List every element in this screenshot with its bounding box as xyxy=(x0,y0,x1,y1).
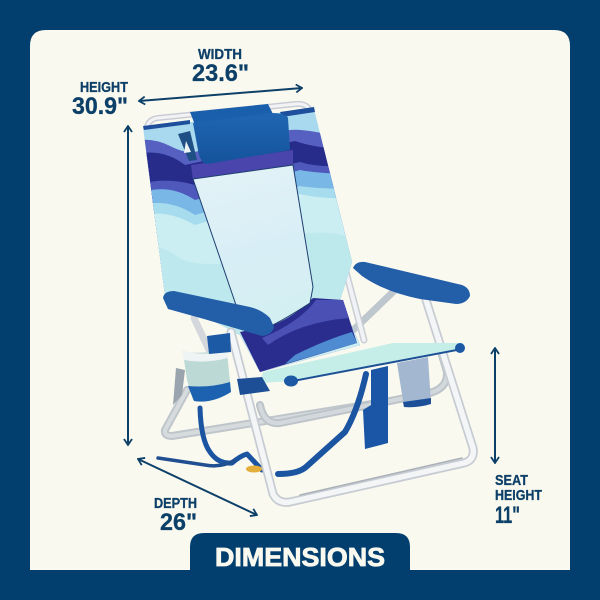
arrow: width xyxy=(139,88,302,101)
label: height: 30.9" xyxy=(72,93,128,120)
chair front frame xyxy=(231,300,473,502)
label: width xyxy=(192,46,249,87)
label: height: HEIGHT xyxy=(80,79,128,96)
seat front tube xyxy=(284,343,465,386)
arrow: height xyxy=(127,126,129,445)
label: width: WIDTH xyxy=(198,46,242,63)
seat fabric xyxy=(260,343,463,383)
title tab: DIMENSIONS xyxy=(215,542,385,572)
chair top rail xyxy=(146,104,311,130)
chair illustration xyxy=(130,100,473,502)
label: seat height: HEIGHT xyxy=(495,487,542,504)
arrow: seat height xyxy=(494,348,496,463)
chair rear frame xyxy=(165,268,447,436)
chair back fabric xyxy=(143,112,360,372)
label: seat height: SEAT xyxy=(495,472,528,489)
label: seat height xyxy=(495,472,542,529)
chair mesh panel xyxy=(193,165,313,325)
seat dark fabric xyxy=(240,298,357,372)
label: height xyxy=(72,79,128,120)
label: seat height: 11" xyxy=(495,502,520,529)
chair top edge strip xyxy=(143,107,315,130)
right armrest xyxy=(353,262,470,304)
title tab xyxy=(190,533,410,572)
headrest pillow xyxy=(190,104,290,164)
yellow buckle xyxy=(246,466,262,472)
grey side pad xyxy=(173,368,185,405)
grey pouch xyxy=(397,357,431,407)
label: depth: 26" xyxy=(160,509,197,536)
headrest band xyxy=(191,150,293,180)
logo mark xyxy=(184,141,191,153)
left armrest xyxy=(163,291,274,336)
label: depth: DEPTH xyxy=(154,495,197,512)
seat hinge xyxy=(237,377,270,395)
chair straps xyxy=(158,374,366,474)
label: depth xyxy=(154,495,197,536)
label: width: 23.6" xyxy=(192,60,249,87)
arrow: depth xyxy=(138,459,257,515)
cup holder xyxy=(182,333,231,402)
logo tag xyxy=(178,131,197,161)
back strap xyxy=(363,366,388,449)
